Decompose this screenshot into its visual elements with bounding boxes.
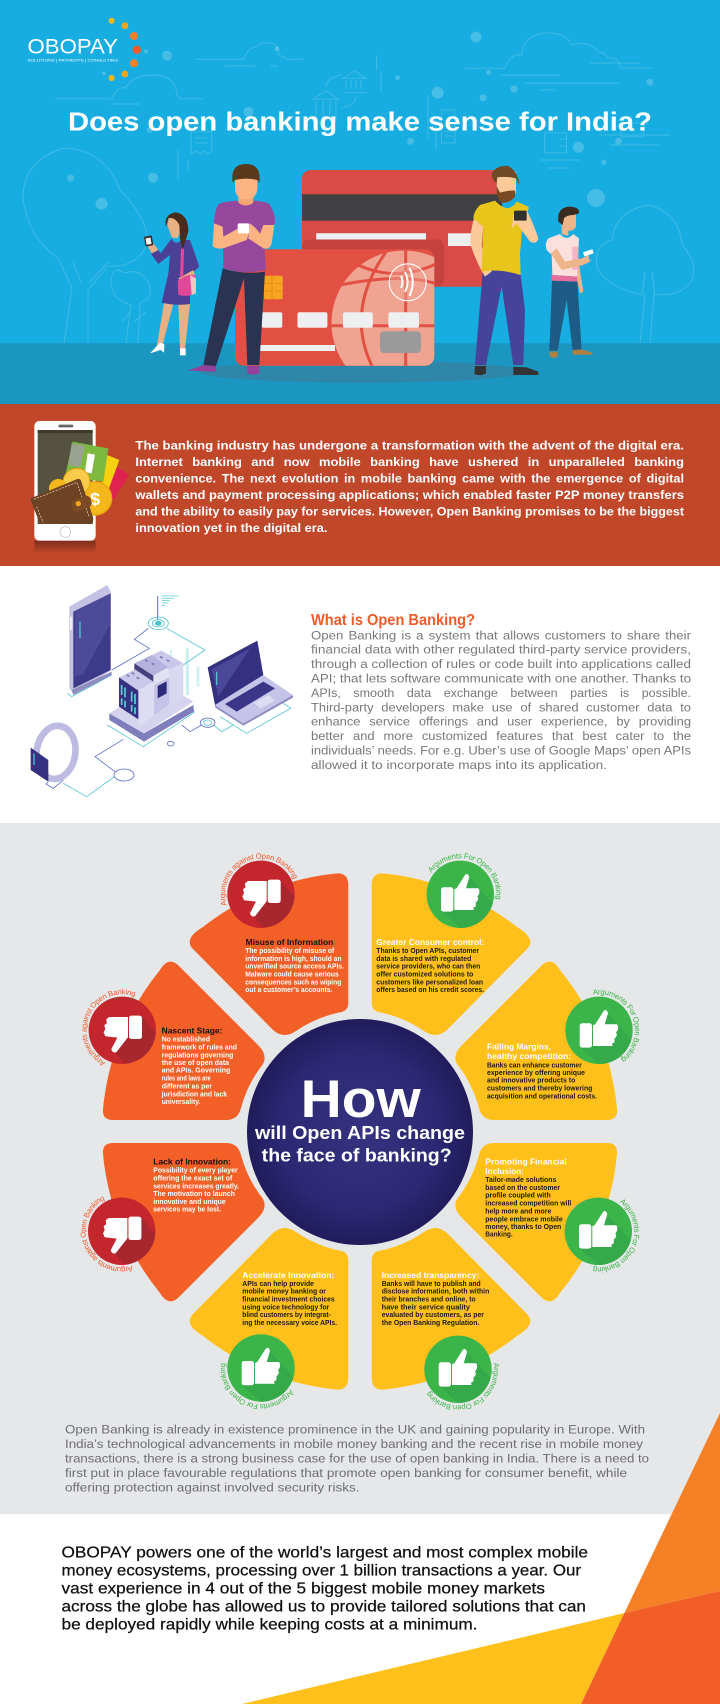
text: falling margins: experience by offering unique bbox=[487, 1070, 585, 1077]
text: promoting financial inclusion: Banking. bbox=[485, 1232, 513, 1239]
text block: OBOPAY summary bbox=[62, 1545, 588, 1634]
intro text: convenience. The next evolution in mobile banking came with the emergence of digital bbox=[135, 472, 684, 486]
icon: back credit card bbox=[302, 170, 502, 287]
text block: open banking definition bbox=[311, 628, 691, 772]
text: accelerate innovation: blind customers by integrat- bbox=[242, 1312, 331, 1319]
text: promoting financial inclusion: Tailor-made solutions bbox=[485, 1177, 556, 1184]
text: nascent stage: regulations governing bbox=[162, 1052, 233, 1059]
text: increased transparency: the Open Banking Regulation. bbox=[382, 1320, 479, 1327]
text: nascent stage: Nascent Stage: bbox=[162, 1026, 222, 1036]
panel: how will open APIs change banking bbox=[0, 823, 720, 1514]
figure: man in purple shirt bbox=[188, 164, 275, 375]
icon: thumbs up badge bbox=[227, 1334, 295, 1402]
text: promoting financial inclusion bbox=[485, 1156, 571, 1239]
text: promoting financial inclusion: people embrace mobile bbox=[485, 1216, 563, 1223]
panel: accelerate innovation bbox=[190, 1228, 348, 1410]
panel: increased transparency bbox=[372, 1228, 530, 1410]
intro text: wallets and payment processing applications; which enabled faster P2P money transfers bbox=[134, 488, 684, 502]
text block: OBOPAY summary: OBOPAY powers one of the world’s largest and most complex mobile bbox=[62, 1545, 588, 1562]
text: misuse of information: information is high, should an bbox=[245, 956, 342, 963]
illustration: connected devices and server bbox=[31, 585, 293, 797]
icon: isometric server bbox=[109, 651, 194, 742]
title: Does open banking make sense for India? bbox=[68, 107, 652, 137]
text: nascent stage: universality. bbox=[162, 1099, 200, 1106]
text: falling margins: Banks can enhance customer bbox=[487, 1062, 582, 1069]
label: arguments for: Arguments For Open Banking bbox=[593, 1200, 640, 1273]
text: greater consumer control: offers based on his credit scores. bbox=[376, 987, 484, 994]
text: greater consumer control: data is shared with regulated bbox=[376, 956, 471, 963]
panel: greater consumer control bbox=[372, 853, 530, 1035]
icon: isometric phone bbox=[69, 585, 112, 695]
text: misuse of information: Misuse of Information bbox=[246, 937, 333, 947]
panel: promoting financial inclusion bbox=[455, 1143, 640, 1302]
text block: open banking definition: Third-party developers make use of shared customer data to bbox=[311, 700, 691, 714]
text block: open banking definition: individuals’ needs. For e.g. Uber’s use of Google Maps’ open APIs bbox=[311, 743, 691, 757]
text: nascent stage: the use of open data bbox=[162, 1060, 229, 1067]
text: nascent stage: jurisdiction and lack bbox=[161, 1091, 227, 1098]
icon: thumbs down badge bbox=[88, 1198, 155, 1265]
text: accelerate innovation: ing the necessary voice APIs. bbox=[242, 1320, 337, 1327]
label: arguments for: Arguments For Open Banking bbox=[428, 853, 502, 900]
icon: phone with wallet, cards and coins: $ bbox=[90, 489, 100, 509]
text: increased transparency: Increased transparency: bbox=[382, 1270, 479, 1280]
text: increased transparency: Banks will have to publish and bbox=[382, 1281, 481, 1288]
text block: OBOPAY summary: across the globe has allowed us to provide tailored solutions that can bbox=[62, 1599, 586, 1616]
label: arguments against: Arguments against Open Banking bbox=[80, 1196, 132, 1272]
logo: OBOPAY: SOLUTIONS | PAYMENTS | CONSULTING bbox=[28, 59, 118, 63]
text: greater consumer control: service providers, who can then bbox=[376, 964, 480, 971]
text block: open banking definition: APIs, smooth data exchange between parties is possible. bbox=[311, 686, 691, 700]
figure: bearded man in yellow shirt bbox=[470, 166, 538, 375]
icon: isometric laptop bbox=[208, 641, 293, 726]
text: accelerate innovation: mobile money banking or bbox=[242, 1289, 326, 1296]
figure: woman with phone bbox=[144, 212, 199, 355]
text: greater consumer control: Thanks to Open APIs, customer bbox=[376, 948, 479, 955]
text block: open banking definition: API; that lets software communicate with one another. Thanks to bbox=[311, 671, 691, 685]
text block: open banking in India: India’s technological advancements in mobile money banking and the recent rise in mobile money bbox=[65, 1437, 644, 1451]
text block: open banking definition: financial data with other regulated third-party service providers, bbox=[311, 643, 691, 657]
text: accelerate innovation: Accelerate Innovation: bbox=[242, 1270, 334, 1280]
text block: open banking in India: Open Banking is already in existence prominence in the UK and gaining popularity in Europe. With bbox=[65, 1423, 645, 1437]
panel: misuse of information bbox=[190, 853, 348, 1035]
text block: open banking definition: enhance service offerings and user experience, by providing bbox=[311, 715, 691, 729]
text: falling margins: healthy competition: bbox=[487, 1051, 571, 1061]
text block: open banking in India: first put in place favourable regulations that promote open banking for consumer benefit, while bbox=[65, 1466, 627, 1480]
logo: OBOPAY bbox=[28, 18, 141, 81]
icon: front credit card bbox=[235, 249, 434, 366]
text: nascent stage: No established bbox=[162, 1036, 210, 1043]
central hub circle: will Open APIs change bbox=[254, 1122, 465, 1143]
text: lack of innovation: innovative and unique bbox=[153, 1199, 226, 1206]
text: misuse of information: The possibility of misuse of bbox=[245, 948, 335, 955]
text block: open banking definition: allowed it to incorporate maps into its application. bbox=[311, 758, 607, 772]
text: misuse of information: consequences such as wiping bbox=[245, 979, 341, 986]
intro text: and the ability to easily pay for services. However, Open Banking promises to be the biggest bbox=[135, 504, 684, 518]
text block: open banking definition: Open Banking is a system that allows customers to share their bbox=[311, 628, 691, 642]
background: faint dots bbox=[67, 32, 653, 210]
text: promoting financial inclusion: Inclusion: bbox=[485, 1166, 524, 1176]
text: increased transparency: have their service quality bbox=[382, 1304, 470, 1311]
panel: lack of innovation bbox=[80, 1143, 265, 1302]
panel: closing section bbox=[0, 1413, 720, 1704]
text: increased transparency bbox=[382, 1270, 489, 1327]
text: falling margins bbox=[487, 1042, 597, 1100]
text: increased transparency: evaluated by customers, as per bbox=[382, 1312, 484, 1319]
icon: thumbs up badge bbox=[565, 997, 633, 1064]
intro text: Internet banking and now mobile banking have ushered in unparalleled banking bbox=[135, 455, 684, 469]
intro text: The banking industry has undergone a transformation with the advent of the digital era. bbox=[135, 438, 684, 452]
text: accelerate innovation bbox=[242, 1270, 337, 1327]
text: accelerate innovation: financial investment choices bbox=[242, 1296, 335, 1303]
text: nascent stage: different as per bbox=[162, 1083, 212, 1090]
text: nascent stage bbox=[161, 1026, 237, 1106]
text: greater consumer control: offer customized solutions to bbox=[376, 971, 473, 978]
text: promoting financial inclusion: help more and more bbox=[485, 1208, 551, 1215]
text block: OBOPAY summary: money ecosystems, processing over 1 billion transactions a year. Our bbox=[62, 1563, 581, 1580]
icon: thumbs down badge bbox=[89, 997, 156, 1064]
text: lack of innovation: services may be lost. bbox=[153, 1207, 221, 1214]
text: falling margins: and innovative products to bbox=[487, 1078, 575, 1085]
text: greater consumer control: Greater Consumer control: bbox=[376, 937, 484, 947]
heading: What is Open Banking?: What is Open Banking? bbox=[311, 612, 475, 629]
panel: hero header bbox=[0, 0, 720, 404]
label: arguments for: Arguments For Open Banking bbox=[593, 989, 640, 1062]
icon: thumbs down badge bbox=[227, 861, 295, 928]
text block: open banking definition: better and more customized features that best cater to the bbox=[311, 729, 691, 743]
decorative corner triangles bbox=[242, 1413, 720, 1704]
icon: thumbs up badge bbox=[427, 861, 494, 928]
text: lack of innovation: The motivation to launch bbox=[153, 1191, 235, 1198]
text: nascent stage: and APIs. Governing bbox=[162, 1068, 230, 1075]
text: falling margins: Falling Margins, bbox=[487, 1042, 551, 1052]
panel: falling margins bbox=[455, 962, 640, 1120]
text block: open banking in India bbox=[65, 1423, 649, 1495]
text: nascent stage: framework of rules and bbox=[162, 1044, 237, 1051]
text: nascent stage: rules and laws are bbox=[162, 1076, 211, 1083]
text: promoting financial inclusion: money, thanks to Open bbox=[485, 1224, 561, 1231]
text: greater consumer control bbox=[376, 937, 484, 994]
text: promoting financial inclusion: profile coupled with bbox=[485, 1193, 551, 1200]
figure: boy in pink shirt bbox=[546, 207, 594, 358]
intro text: innovation yet in the digital era. bbox=[135, 521, 327, 535]
text: misuse of information: out a customer’s accounts. bbox=[245, 987, 332, 994]
text: lack of innovation: services increases greatly. bbox=[153, 1183, 239, 1190]
text: accelerate innovation: using voice technology for bbox=[242, 1304, 330, 1311]
text block: OBOPAY summary: be deployed rapidly while keeping costs at a minimum. bbox=[62, 1617, 478, 1634]
logo: OBOPAY: OBOPAY bbox=[28, 34, 118, 58]
icon: phone with wallet, cards and coins bbox=[31, 421, 129, 553]
text: promoting financial inclusion: increased competition will bbox=[485, 1200, 571, 1207]
central hub circle: the face of banking? bbox=[262, 1145, 452, 1166]
text: greater consumer control: customers like personalized loan bbox=[376, 979, 483, 986]
background: faint clouds, trees and bank icons bbox=[23, 33, 694, 343]
central hub circle: How bbox=[301, 1070, 422, 1129]
ground shadow bbox=[200, 361, 526, 383]
text block: OBOPAY summary: vast experience in 4 out of the 5 biggest mobile money markets bbox=[62, 1581, 545, 1598]
text: lack of innovation: Possibility of every player bbox=[153, 1167, 238, 1174]
text block: open banking in India: transactions, there is a strong business case for the use of open banking in India. There is a need to bbox=[65, 1452, 649, 1466]
icon: isometric smartwatch bbox=[31, 723, 79, 782]
text: increased transparency: disclose information, both within bbox=[382, 1289, 489, 1296]
text block: open banking in India: offering protection against involved security risks. bbox=[65, 1481, 360, 1495]
label: arguments for: Arguments For Open Banking bbox=[220, 1364, 293, 1410]
text: falling margins: customers and thereby lowering bbox=[487, 1085, 592, 1092]
label: arguments for: Arguments For Open Banking bbox=[426, 1363, 500, 1410]
text: misuse of information: Malware could cause serious bbox=[245, 971, 339, 978]
text: lack of innovation bbox=[153, 1156, 239, 1214]
label: arguments against: Arguments against Open Banking bbox=[220, 853, 298, 906]
text: misuse of information: unverified source access APIs. bbox=[245, 964, 344, 971]
intro text bbox=[134, 438, 684, 535]
text: lack of innovation: Lack of Innovation: bbox=[153, 1156, 231, 1166]
label: arguments against: Arguments against Open Banking bbox=[82, 988, 136, 1066]
icon: thumbs up badge bbox=[565, 1198, 632, 1265]
text: falling margins: acquisition and operational costs. bbox=[487, 1093, 597, 1100]
panel: intro band bbox=[0, 404, 720, 566]
central hub circle bbox=[247, 1019, 473, 1245]
text block: open banking definition: through a collection of rules or code built into applications called bbox=[311, 657, 691, 671]
icon: thumbs up badge bbox=[424, 1336, 492, 1403]
text: accelerate innovation: APIs can help provide bbox=[242, 1281, 314, 1288]
text: promoting financial inclusion: based on the customer bbox=[485, 1185, 560, 1192]
panel: nascent stage bbox=[82, 962, 265, 1120]
text: misuse of information bbox=[245, 937, 344, 994]
text: increased transparency: their branches and online, to bbox=[382, 1296, 476, 1303]
text: lack of innovation: offering the exact set of bbox=[153, 1175, 233, 1182]
text: promoting financial inclusion: Promoting Financial bbox=[485, 1156, 567, 1166]
panel: what is open banking bbox=[0, 566, 720, 823]
